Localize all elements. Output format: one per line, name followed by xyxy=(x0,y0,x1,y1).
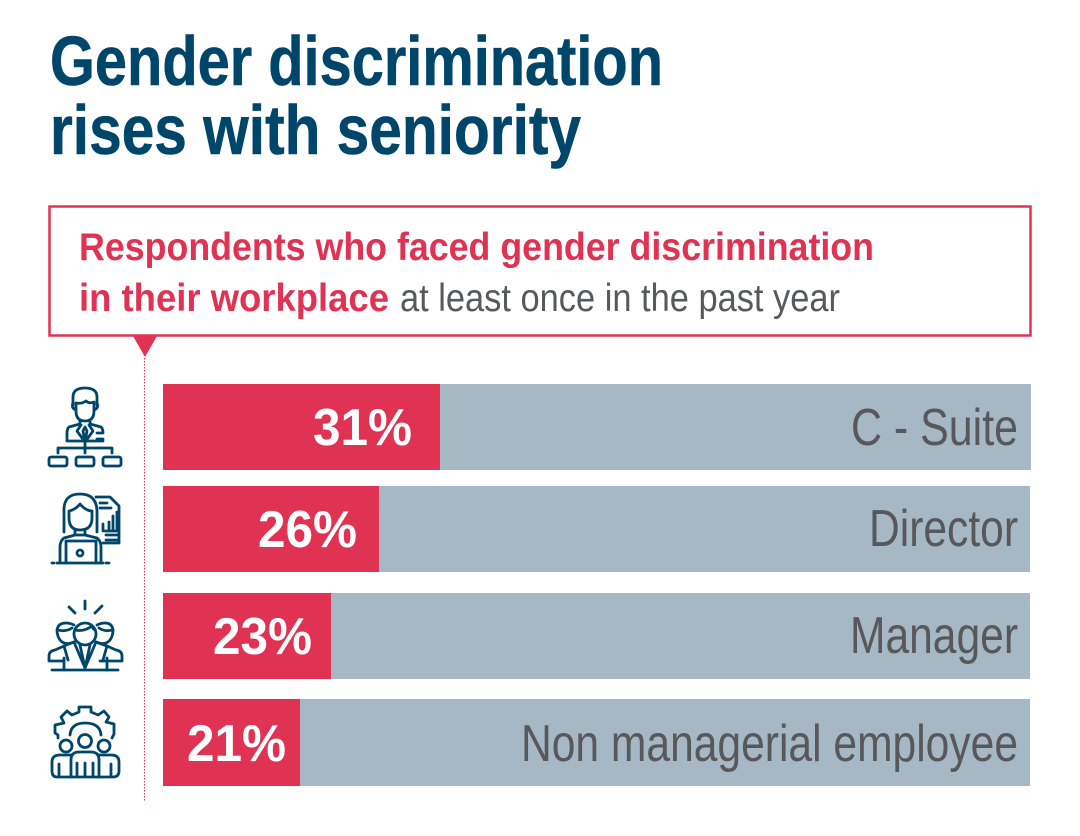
callout text xyxy=(79,226,874,320)
icon: employees with gear xyxy=(52,707,119,777)
bar: Director 26%: Director xyxy=(869,500,1018,558)
bar: Manager 23% xyxy=(163,593,1030,679)
bar: Non managerial employee 21% xyxy=(163,699,1030,786)
callout text: at least once in the past year xyxy=(400,277,840,320)
icon: woman with laptop and report xyxy=(52,494,119,563)
title: Gender discrimination xyxy=(50,22,663,100)
bar: Non managerial employee 21%: 21% xyxy=(187,715,286,773)
title: rises with seniority xyxy=(50,91,581,169)
icon: executive with org chart xyxy=(49,388,121,466)
title xyxy=(50,22,663,169)
bar: Director 26%: 26% xyxy=(258,501,357,559)
bar: C-Suite 31% xyxy=(163,384,1031,470)
callout xyxy=(50,206,1030,357)
bar: C-Suite 31%: 31% xyxy=(313,399,412,457)
callout text: in their workplace xyxy=(79,277,389,320)
icon: management team xyxy=(49,601,122,670)
bar: Manager 23%: Manager xyxy=(850,607,1018,665)
callout text: Respondents who faced gender discrimination xyxy=(79,226,874,269)
bar: Director 26% xyxy=(163,486,1030,572)
bar: Manager 23%: 23% xyxy=(213,608,312,666)
bar: C-Suite 31%: C - Suite xyxy=(851,399,1018,457)
